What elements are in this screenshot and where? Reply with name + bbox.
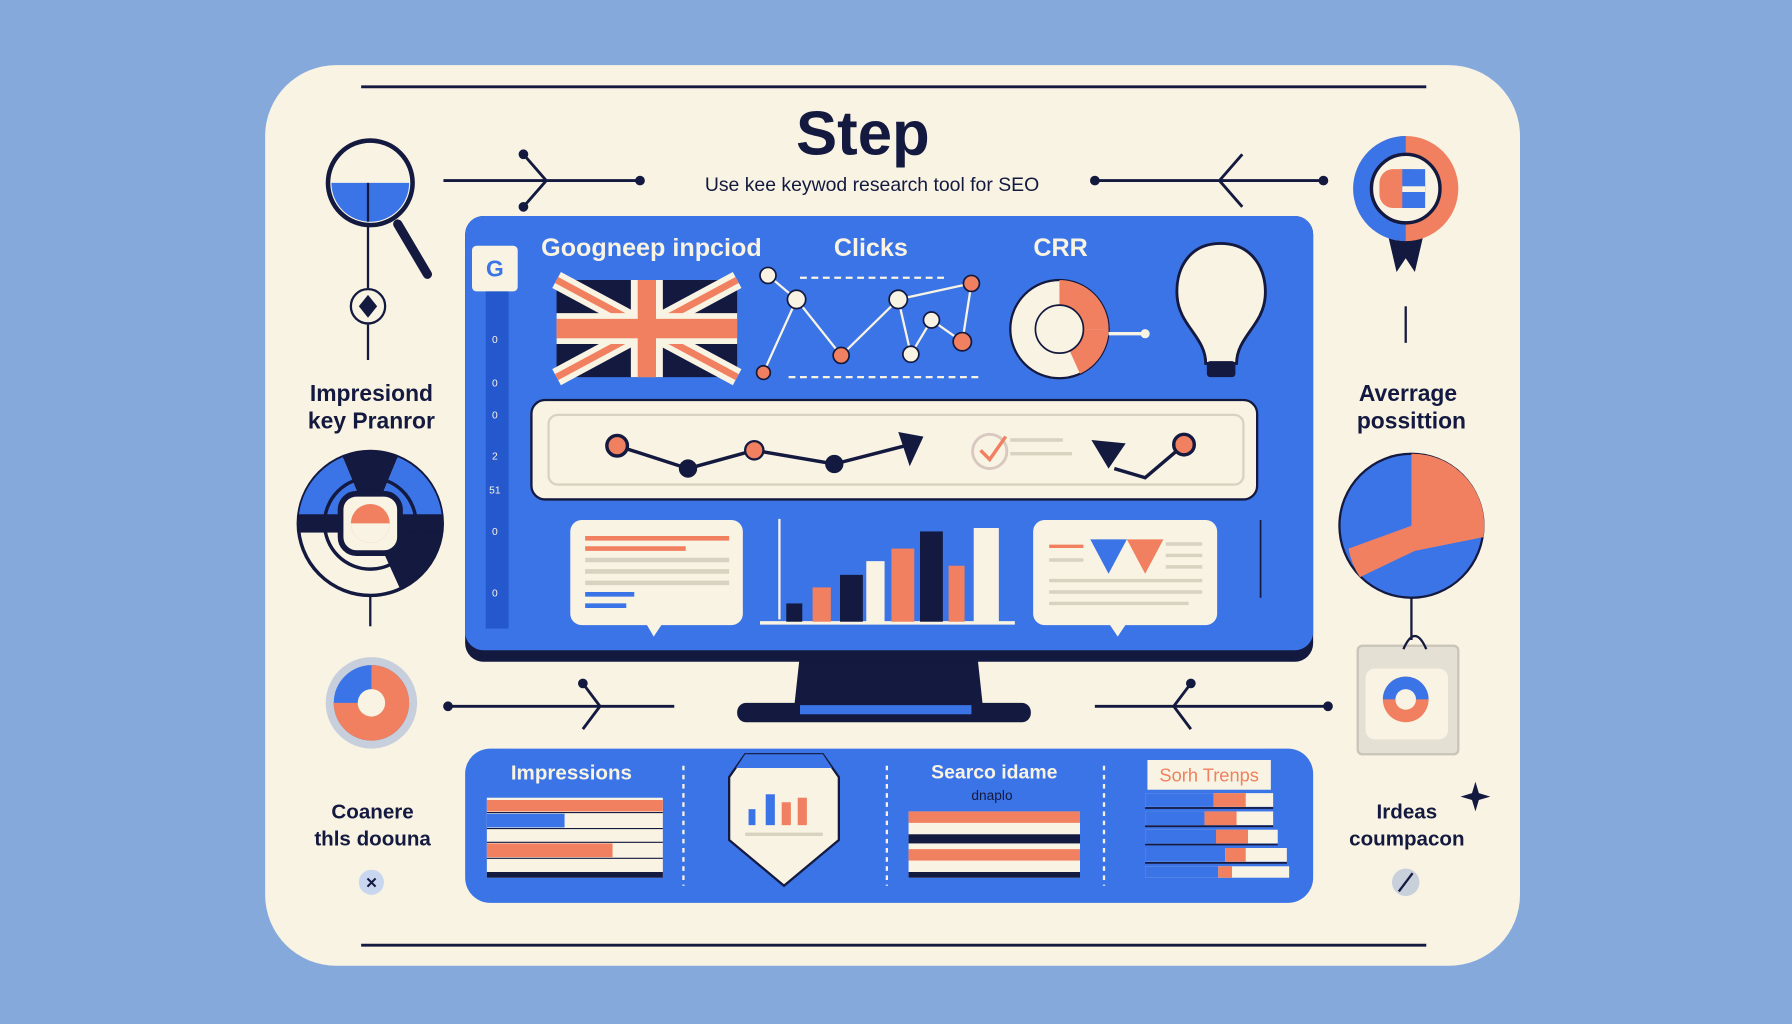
donut CTR	[1010, 280, 1150, 378]
card background	[265, 65, 1520, 966]
bottom: impressions	[487, 761, 663, 878]
text: left label 1: key Pranror	[308, 408, 435, 434]
bottom: impressions: Impressions	[511, 761, 632, 784]
bottom: search trends: Sorh Trenps	[1159, 765, 1259, 786]
icon: donut left	[326, 657, 417, 749]
icon: magnifier	[328, 141, 427, 360]
text: right label 1: Averrage	[1359, 380, 1457, 406]
sidebar: 0	[492, 527, 498, 538]
sidebar: 0	[492, 378, 498, 389]
arrow: top right	[1091, 154, 1327, 207]
arrow: bottom right	[1095, 680, 1331, 729]
speech bubble left	[570, 520, 743, 637]
sidebar	[472, 246, 518, 629]
line chart clicks	[757, 267, 983, 379]
sidebar: G	[486, 256, 504, 282]
icon: bag	[1358, 636, 1458, 754]
bottom: search trends	[1145, 760, 1289, 878]
arrow: bottom left	[445, 680, 674, 729]
icon: small left	[359, 870, 384, 895]
bottom: shield chart icon	[729, 754, 839, 886]
text: left label 2: Coanere	[331, 800, 414, 823]
bottom panel	[465, 749, 1313, 903]
icon: radial target	[298, 451, 442, 626]
icon: light bulb	[1177, 243, 1265, 377]
sidebar: 2	[492, 451, 498, 462]
icon: sparkle	[1461, 782, 1490, 811]
arrow: top left	[443, 151, 643, 210]
text: left label 2	[314, 800, 431, 851]
text: left label 1: Impresiond	[310, 380, 433, 406]
sidebar: 0	[492, 410, 498, 421]
title: Step	[796, 99, 930, 168]
pie chart	[1339, 454, 1484, 640]
monitor	[465, 216, 1313, 722]
bottom: search volume	[909, 761, 1080, 878]
text: left label 1	[308, 380, 435, 434]
sidebar: 51	[489, 486, 501, 497]
text: right label 1: possittion	[1357, 408, 1466, 434]
search bar	[531, 400, 1257, 499]
icon: badge	[1353, 136, 1458, 343]
headers: Clicks	[834, 234, 908, 262]
speech bubble right	[1033, 520, 1217, 637]
headers	[541, 234, 1088, 262]
text: right label 1	[1357, 380, 1466, 434]
text: left label 2: thls doouna	[314, 828, 431, 851]
sidebar: 0	[492, 589, 498, 600]
bar chart	[760, 519, 1015, 623]
icon: small right	[1392, 869, 1419, 896]
bottom: search volume: Searco idame	[931, 761, 1058, 783]
bottom: search volume: dnaplo	[971, 788, 1013, 803]
headers: CRR	[1033, 234, 1088, 262]
sidebar: 0	[492, 335, 498, 346]
subtitle: Use kee keywod research tool for SEO	[705, 174, 1039, 196]
icon: small left: ✕	[365, 876, 378, 892]
text: right label 2: Irdeas	[1377, 800, 1437, 823]
text: right label 2	[1349, 800, 1465, 851]
flag	[557, 280, 737, 377]
headers: Googneep inpciod	[541, 234, 762, 262]
text: right label 2: coumpacon	[1349, 828, 1465, 851]
